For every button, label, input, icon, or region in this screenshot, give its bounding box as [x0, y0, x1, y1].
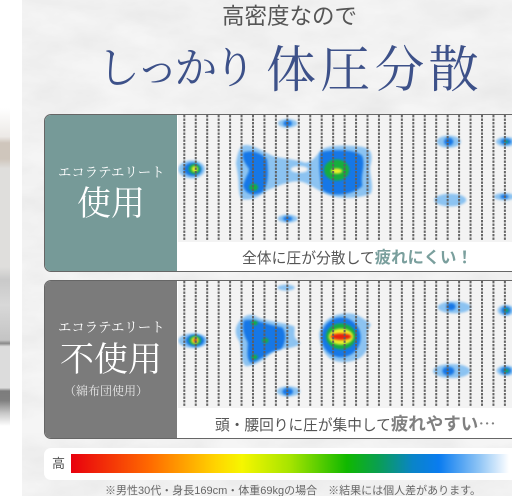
- legend label high: 高: [52, 456, 65, 471]
- light areas: [178, 285, 512, 396]
- light areas: [178, 119, 512, 223]
- title: [97, 42, 483, 98]
- caption text: 頭・腰回りに圧が集中して疲れやすい…: [215, 411, 496, 436]
- caption: used: [178, 242, 512, 271]
- green areas: [189, 140, 508, 191]
- pressure map: not used: [178, 281, 512, 408]
- blue areas: [184, 120, 511, 221]
- photo strip at left edge: [0, 108, 10, 426]
- product name label: エコラテエリート: [58, 165, 165, 180]
- gradient bar: [71, 454, 509, 473]
- legend: pressure colour scale: [44, 448, 512, 480]
- label block: used: [45, 115, 177, 271]
- panel: without Ecolatex: [44, 280, 512, 439]
- used label: 使用: [77, 186, 145, 223]
- pressure map: used: [178, 115, 512, 242]
- yellow areas: [191, 329, 353, 345]
- panel: with Ecolatex: [44, 114, 512, 272]
- not used label: 不使用: [60, 342, 162, 379]
- caption: not used: [178, 408, 512, 438]
- title: 体圧分散: [266, 42, 483, 98]
- label block: not used: [45, 281, 177, 438]
- product name label: エコラテエリート: [58, 320, 165, 335]
- subtitle: 高密度なので: [222, 4, 357, 29]
- red core: [194, 333, 351, 342]
- cotton futon note: （綿布団使用）: [64, 384, 148, 398]
- title: しっかり: [97, 46, 252, 93]
- blue areas: [186, 303, 511, 395]
- green areas: [189, 309, 509, 372]
- hot spots: [192, 166, 342, 174]
- caption text: 全体に圧が分散して疲れにくい！: [242, 249, 473, 267]
